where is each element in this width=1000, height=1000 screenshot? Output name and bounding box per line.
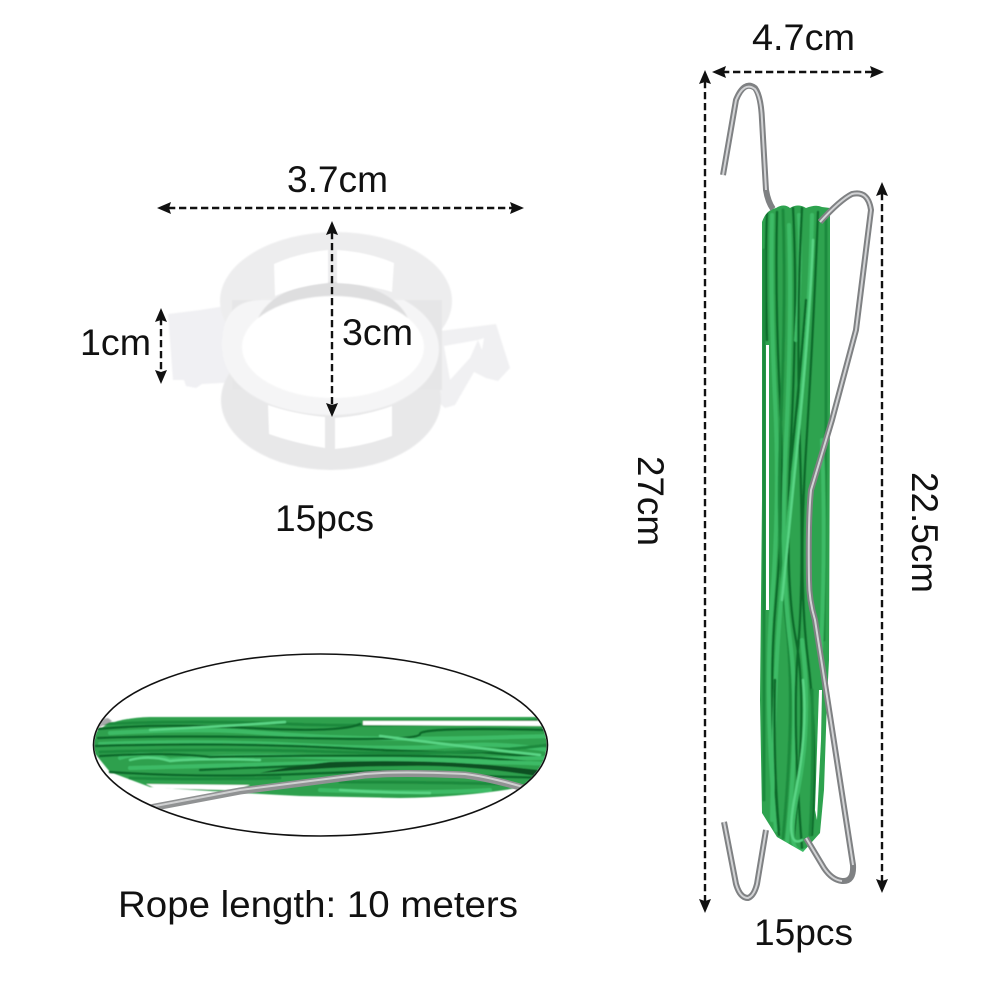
green rope bundle xyxy=(760,206,830,852)
top right window xyxy=(337,250,394,292)
metal wire top hook xyxy=(723,86,773,209)
clip windows xyxy=(268,250,394,449)
clip front ring xyxy=(222,300,439,415)
metal wire long hook xyxy=(806,193,871,881)
metal wire bottom hook xyxy=(724,822,766,898)
label: 4.7cm: 4.7cm xyxy=(752,17,855,58)
clip centre hole xyxy=(242,296,424,398)
clip lower band xyxy=(221,330,441,470)
latch opening right xyxy=(478,338,484,350)
arrow: hook width xyxy=(712,66,884,78)
arrow: total length xyxy=(699,70,711,913)
clip right latch xyxy=(424,324,510,408)
label: 3.7cm: 3.7cm xyxy=(287,159,388,200)
panel: rope winder with dimensions xyxy=(630,17,945,953)
oval outline xyxy=(94,654,548,836)
latch opening xyxy=(444,340,478,380)
icon: white plastic clip xyxy=(168,232,510,470)
rope close-up strands xyxy=(92,717,548,798)
label: 3cm: 3cm xyxy=(342,312,413,353)
bottom left window xyxy=(268,405,325,448)
clip back ring xyxy=(220,232,452,370)
arrow: hook inner length xyxy=(876,182,888,893)
clip side shading xyxy=(232,300,442,390)
arrow: clip inner diameter xyxy=(326,221,338,417)
label: 22.5cm: 22.5cm xyxy=(904,472,945,593)
label: 27cm: 27cm xyxy=(630,456,671,546)
panel: plant clip with dimensions xyxy=(80,159,524,539)
clip left latch xyxy=(168,306,244,388)
bottom right window xyxy=(335,406,392,449)
back rim xyxy=(255,282,411,382)
top left window xyxy=(274,250,328,296)
wire in close-up xyxy=(150,772,530,808)
arrow: clip width xyxy=(157,202,524,214)
label: rope length: Rope length: 10 meters xyxy=(118,884,518,925)
label: 1cm: 1cm xyxy=(80,322,151,363)
arrow: clip height xyxy=(155,308,167,384)
label: hook quantity: 15pcs xyxy=(754,912,853,953)
label: clip quantity: 15pcs xyxy=(275,498,374,539)
panel: rope close-up oval xyxy=(92,654,548,836)
